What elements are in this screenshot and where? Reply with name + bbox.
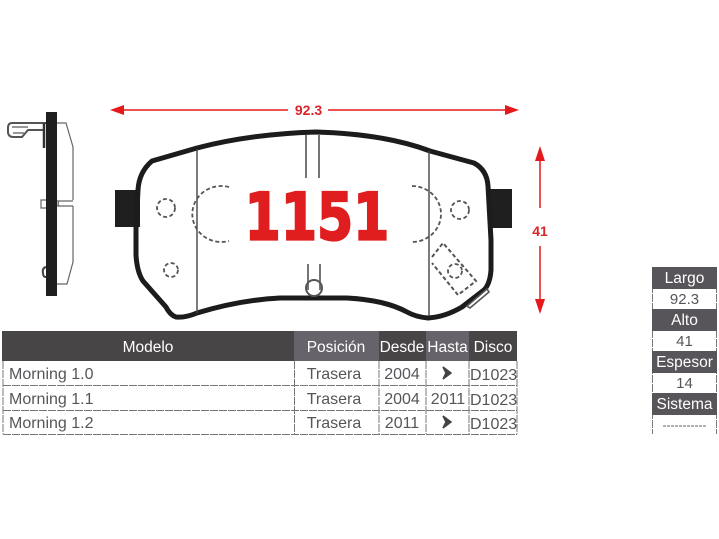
table grid [3, 361, 517, 434]
dimension arrow: height 41: 41 [532, 223, 548, 239]
specifications panel: Largo [665, 270, 704, 287]
specifications panel: Sistema [656, 396, 713, 413]
table row: Morning 1.2: Trasera [307, 415, 361, 432]
specifications panel: Alto [671, 312, 698, 329]
table header row [2, 331, 517, 361]
table header row: Desde [380, 339, 424, 356]
table header row: Posición [307, 339, 365, 356]
pad outline [136, 132, 491, 318]
table row: Morning 1.1: 2004 [384, 391, 420, 408]
table row: Morning 1.0: Morning 1.0 [9, 366, 94, 383]
specifications panel: 14 [676, 375, 693, 392]
part number 1151: 1151 [245, 179, 389, 255]
specifications panel: ----------- [663, 418, 706, 432]
table row: Morning 1.1: D1023 [470, 392, 517, 409]
specifications panel: 92.3 [670, 291, 699, 308]
table row: Morning 1.1 [9, 391, 517, 409]
table row: Morning 1.2: 2011 [385, 415, 419, 432]
specifications panel [652, 267, 717, 434]
right tab [489, 189, 512, 228]
left tab [115, 190, 140, 227]
table row: Morning 1.1: Trasera [307, 391, 361, 408]
table header row: Modelo [123, 339, 173, 356]
side view drawing of brake pad [8, 112, 73, 296]
table row: Morning 1.1: 2011 [431, 391, 465, 408]
dimension arrow: length 92.3: 92.3 [295, 102, 322, 118]
table header row: Disco [474, 339, 512, 356]
table header row: Hasta [427, 339, 468, 356]
table row: Morning 1.2 [9, 415, 517, 433]
dimension arrow: length 92.3 [110, 102, 519, 118]
table row: Morning 1.0: Trasera [307, 366, 361, 383]
dimension arrow: height 41 [532, 146, 548, 314]
table row: Morning 1.0: 2004 [384, 366, 420, 383]
table row: Morning 1.0: D1023 [470, 367, 517, 384]
specifications panel: Espesor [656, 354, 713, 371]
table row: Morning 1.2: D1023 [470, 416, 517, 433]
brake pad front drawing [115, 132, 512, 318]
specifications panel: 41 [676, 333, 693, 350]
table row: Morning 1.0 [9, 366, 517, 384]
dashed circles [157, 186, 476, 295]
table row: Morning 1.1: Morning 1.1 [9, 391, 94, 408]
table row: Morning 1.2: Morning 1.2 [9, 415, 94, 432]
